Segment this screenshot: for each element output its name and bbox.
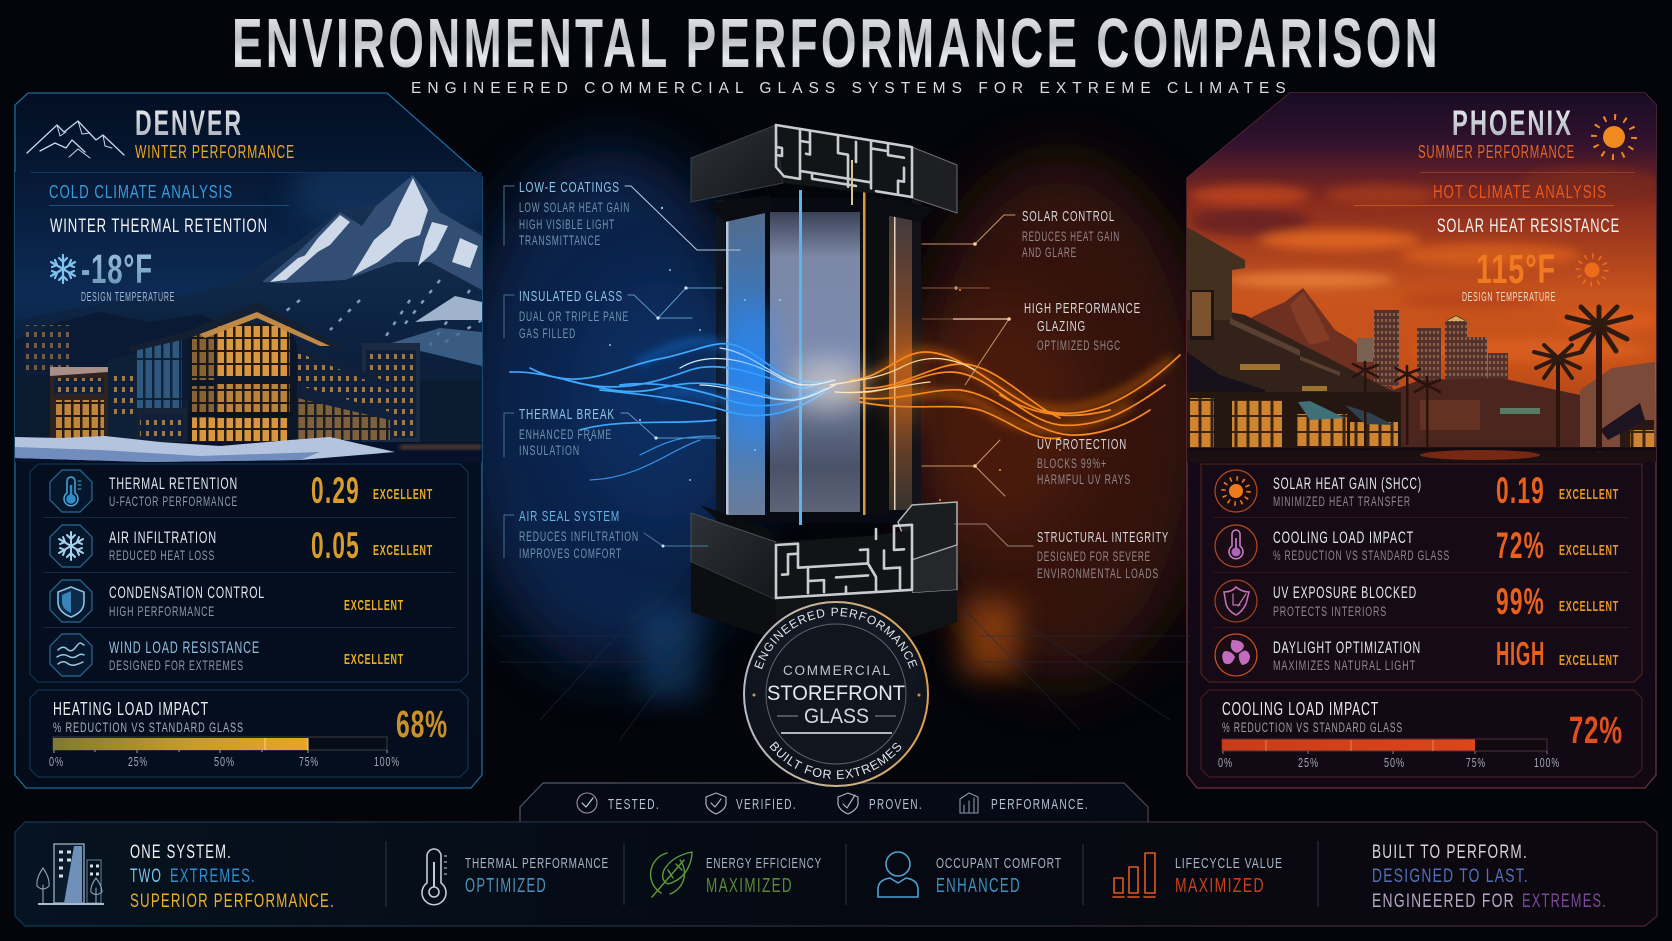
climate analysis label: HOT CLIMATE ANALYSIS	[1433, 182, 1607, 202]
temperature value: 115°F	[1476, 246, 1556, 292]
chart: cooling load impact: 72%	[1569, 710, 1623, 752]
callout: structural integrity: DESIGNED FOR SEVERE	[1037, 549, 1151, 564]
season label: WINTER PERFORMANCE	[135, 142, 295, 162]
metric: daylight optimization: MAXIMIZES NATURAL LIGHT	[1273, 658, 1416, 673]
benefit: energy efficiency: MAXIMIZED	[706, 875, 793, 897]
floor reflections	[500, 600, 1190, 740]
callout: low-e coatings: LOW SOLAR HEAT GAIN	[519, 200, 630, 215]
badge: commercial storefront glass seal	[743, 601, 929, 787]
metrics panel: Denver	[30, 464, 468, 682]
callout: insulated glass: INSULATED GLASS	[519, 288, 623, 305]
top frame	[691, 125, 957, 213]
metric: daylight optimization: HIGH	[1496, 635, 1545, 672]
season label: SUMMER PERFORMANCE	[1418, 142, 1575, 162]
callout: insulated glass	[504, 286, 722, 341]
benefit: lifecycle value: MAXIMIZED	[1175, 875, 1265, 897]
callout: thermal break: THERMAL BREAK	[519, 406, 615, 423]
scene: Phoenix desert sunset street	[1187, 93, 1660, 463]
metric: solar heat gain: EXCELLENT	[1559, 486, 1619, 503]
metric: UV exposure blocked	[1215, 580, 1619, 622]
tagline: one system: SUPERIOR PERFORMANCE.	[130, 890, 335, 912]
metric: cooling load impact: 72%	[1496, 525, 1545, 566]
chart: cooling load impact: 0%	[1218, 756, 1233, 770]
metric: condensation control: CONDENSATION CONTROL	[109, 584, 265, 602]
callout: UV protection: BLOCKS 99%+	[1037, 456, 1107, 471]
callout: high performance glazing: HIGH PERFORMANCE	[1024, 300, 1141, 317]
callout: high performance glazing: GLAZING	[1037, 318, 1086, 335]
benefit: occupant comfort: OCCUPANT COMFORT	[936, 855, 1062, 872]
chart: heating load impact: 100%	[374, 755, 400, 769]
temperature caption: DESIGN TEMPERATURE	[81, 290, 175, 304]
metric: solar heat gain: MINIMIZED HEAT TRANSFER	[1273, 494, 1411, 509]
icon: verified shield	[706, 793, 726, 814]
metric: air infiltration: AIR INFILTRATION	[109, 529, 217, 547]
metric: cooling load impact	[1215, 525, 1619, 567]
tagline: one system: ONE SYSTEM.	[130, 841, 232, 863]
metric: UV exposure blocked: 99%	[1496, 581, 1545, 622]
callout: low-e coatings	[504, 179, 740, 250]
chart: heating load impact: 0%	[49, 755, 64, 769]
icon: city buildings	[37, 844, 104, 904]
metric: UV exposure blocked: UV EXPOSURE BLOCKED	[1273, 584, 1417, 602]
benefit: thermal performance	[422, 849, 609, 905]
metric: air infiltration: EXCELLENT	[373, 542, 433, 559]
metric: thermal retention: U-FACTOR PERFORMANCE	[109, 493, 238, 509]
metric: condensation control	[50, 580, 404, 622]
chart: heating load impact: HEATING LOAD IMPACT	[53, 699, 209, 719]
chart: cooling load impact	[1201, 690, 1642, 777]
badge: commercial storefront glass seal: COMMERCIAL	[783, 663, 890, 678]
metric: air infiltration: REDUCED HEAT LOSS	[109, 547, 215, 563]
callout: solar control: AND GLARE	[1022, 245, 1077, 260]
badge: commercial storefront glass seal: BUILT FOR EXTREMES	[770, 741, 902, 780]
illustration: glass storefront cross-section	[691, 125, 957, 640]
benefit: energy efficiency	[651, 852, 822, 897]
temperature value: -18°F	[81, 246, 153, 292]
benefit: occupant comfort	[878, 852, 1062, 897]
callout: high performance glazing: OPTIMIZED SHGC	[1037, 338, 1121, 353]
metric: cooling load impact: COOLING LOAD IMPACT	[1273, 529, 1414, 547]
benefit: occupant comfort: ENHANCED	[936, 875, 1021, 897]
icon: temperature sun	[1578, 256, 1606, 284]
particles	[589, 207, 1061, 501]
callout: thermal break: ENHANCED FRAME	[519, 427, 612, 442]
metric: daylight optimization: EXCELLENT	[1559, 652, 1619, 669]
scene: Denver mountains and glass building	[15, 172, 482, 462]
tagline: built to perform: EXTREMES.	[1522, 890, 1607, 912]
callout: structural integrity: ENVIRONMENTAL LOADS	[1037, 566, 1159, 581]
energy flow: cold blue waves	[510, 342, 835, 480]
callout: air seal system	[504, 508, 708, 561]
metric: UV exposure blocked: PROTECTS INTERIORS	[1273, 604, 1387, 619]
metric: wind load resistance: EXCELLENT	[344, 651, 404, 668]
callout: UV protection	[922, 436, 1131, 496]
energy flow: hot orange waves	[830, 352, 1180, 438]
tagline: one system: TWO	[130, 865, 162, 887]
bottom banner	[15, 822, 1657, 926]
panel: Denver winter performance	[15, 93, 510, 788]
tagline: built to perform: DESIGNED TO LAST.	[1372, 865, 1529, 887]
callout: thermal break: INSULATION	[519, 443, 580, 458]
chart: heating load impact: 50%	[214, 755, 235, 769]
callout: solar control	[922, 208, 1120, 290]
callout: air seal system: AIR SEAL SYSTEM	[519, 508, 620, 525]
chart: heating load impact: 25%	[128, 755, 148, 769]
callout: structural integrity: STRUCTURAL INTEGRITY	[1037, 529, 1169, 546]
chart: cooling load impact: % REDUCTION VS STANDARD GLASS	[1222, 720, 1403, 735]
analysis heading: WINTER THERMAL RETENTION	[50, 216, 268, 237]
metric: UV exposure blocked: EXCELLENT	[1559, 598, 1619, 615]
center glow	[732, 300, 919, 450]
callout: air seal system: REDUCES INFILTRATION	[519, 529, 639, 544]
icon: proven shield	[838, 793, 858, 814]
strip: tested verified proven performance	[520, 783, 1148, 823]
callout: high performance glazing	[922, 300, 1141, 385]
subtitle: ENGINEERED COMMERCIAL GLASS SYSTEMS FOR EXTREME CLIMATES	[411, 80, 1287, 97]
panel: Phoenix summer performance	[1187, 93, 1660, 788]
chart: heating load impact: 75%	[299, 755, 319, 769]
chart: heating load impact: 68%	[396, 704, 448, 746]
bottom frame	[691, 502, 957, 640]
tagline: one system	[130, 841, 335, 912]
callout: low-e coatings: HIGH VISIBLE LIGHT	[519, 217, 615, 232]
icon: sun	[1594, 117, 1634, 157]
metric: cooling load impact: % REDUCTION VS STANDARD GLASS	[1273, 548, 1450, 563]
strip: tested verified proven performance: PROVEN.	[869, 796, 923, 813]
callout: low-e coatings: LOW-E COATINGS	[519, 179, 620, 196]
icon: mountain range	[27, 121, 124, 158]
chart: heating load impact	[30, 690, 468, 777]
strip: tested verified proven performance: VERIFIED.	[736, 796, 797, 813]
metric: daylight optimization: DAYLIGHT OPTIMIZATION	[1273, 639, 1421, 657]
icon: performance chart	[960, 793, 978, 813]
chart: cooling load impact: 50%	[1384, 756, 1405, 770]
badge: commercial storefront glass seal: GLASS	[804, 705, 869, 728]
tagline: built to perform: ENGINEERED FOR	[1372, 890, 1515, 912]
metric: wind load resistance: DESIGNED FOR EXTREMES	[109, 657, 244, 673]
callout: UV protection: UV PROTECTION	[1037, 436, 1127, 453]
benefit: thermal performance: OPTIMIZED	[465, 875, 547, 897]
callout: insulated glass: DUAL OR TRIPLE PANE	[519, 309, 629, 324]
chart: cooling load impact: COOLING LOAD IMPACT	[1222, 699, 1379, 719]
metric: thermal retention: EXCELLENT	[373, 486, 433, 503]
city name: PHOENIX	[1452, 104, 1573, 143]
callout: air seal system: IMPROVES COMFORT	[519, 546, 622, 561]
benefit: energy efficiency: ENERGY EFFICIENCY	[706, 855, 822, 872]
tagline: one system: EXTREMES.	[170, 865, 256, 887]
city name: DENVER	[135, 104, 243, 143]
metric: thermal retention: 0.29	[311, 470, 360, 511]
glass panes	[700, 190, 935, 545]
metric: wind load resistance	[50, 634, 404, 676]
callout: UV protection: HARMFUL UV RAYS	[1037, 472, 1131, 487]
chart: cooling load impact: 100%	[1534, 756, 1560, 770]
strip: tested verified proven performance: PERFORMANCE.	[991, 796, 1089, 813]
callout: insulated glass: GAS FILLED	[519, 326, 576, 341]
climate analysis label: COLD CLIMATE ANALYSIS	[49, 182, 233, 202]
callout: structural integrity	[955, 524, 1169, 581]
metric: thermal retention: THERMAL RETENTION	[109, 475, 238, 493]
chart: heating load impact: % REDUCTION VS STANDARD GLASS	[53, 720, 244, 735]
metric: air infiltration: 0.05	[311, 525, 360, 566]
metrics panel: Phoenix	[1201, 464, 1642, 682]
benefit: lifecycle value: LIFECYCLE VALUE	[1175, 855, 1283, 872]
metric: air infiltration	[50, 525, 433, 567]
callout: solar control: SOLAR CONTROL	[1022, 208, 1115, 225]
icon: tested check	[577, 793, 597, 813]
metric: condensation control: HIGH PERFORMANCE	[109, 603, 215, 619]
metric: solar heat gain: SOLAR HEAT GAIN (SHCC)	[1273, 475, 1422, 493]
benefit: thermal performance: THERMAL PERFORMANCE	[465, 855, 609, 872]
icon: snowflake	[51, 255, 75, 283]
metric: daylight optimization	[1215, 634, 1619, 676]
callout: low-e coatings: TRANSMITTANCE	[519, 233, 601, 248]
callout: solar control: REDUCES HEAT GAIN	[1022, 229, 1120, 244]
benefit: lifecycle value	[1113, 853, 1283, 897]
metric: condensation control: EXCELLENT	[344, 597, 404, 614]
chart: cooling load impact: 25%	[1298, 756, 1319, 770]
badge: commercial storefront glass seal: ENGINEERED PERFORMANCE	[754, 608, 918, 670]
metric: solar heat gain: 0.19	[1496, 470, 1545, 511]
badge: commercial storefront glass seal: STOREFRONT	[767, 682, 905, 705]
metric: wind load resistance: WIND LOAD RESISTANCE	[109, 639, 260, 657]
callout: thermal break	[504, 406, 720, 458]
strip: tested verified proven performance: TESTED.	[608, 796, 660, 813]
metric: thermal retention	[50, 470, 433, 512]
tagline: built to perform	[1372, 841, 1607, 912]
tagline: built to perform: BUILT TO PERFORM.	[1372, 841, 1528, 863]
metric: solar heat gain	[1215, 470, 1619, 512]
metric: cooling load impact: EXCELLENT	[1559, 542, 1619, 559]
chart: cooling load impact: 75%	[1466, 756, 1486, 770]
temperature caption: DESIGN TEMPERATURE	[1462, 290, 1556, 304]
